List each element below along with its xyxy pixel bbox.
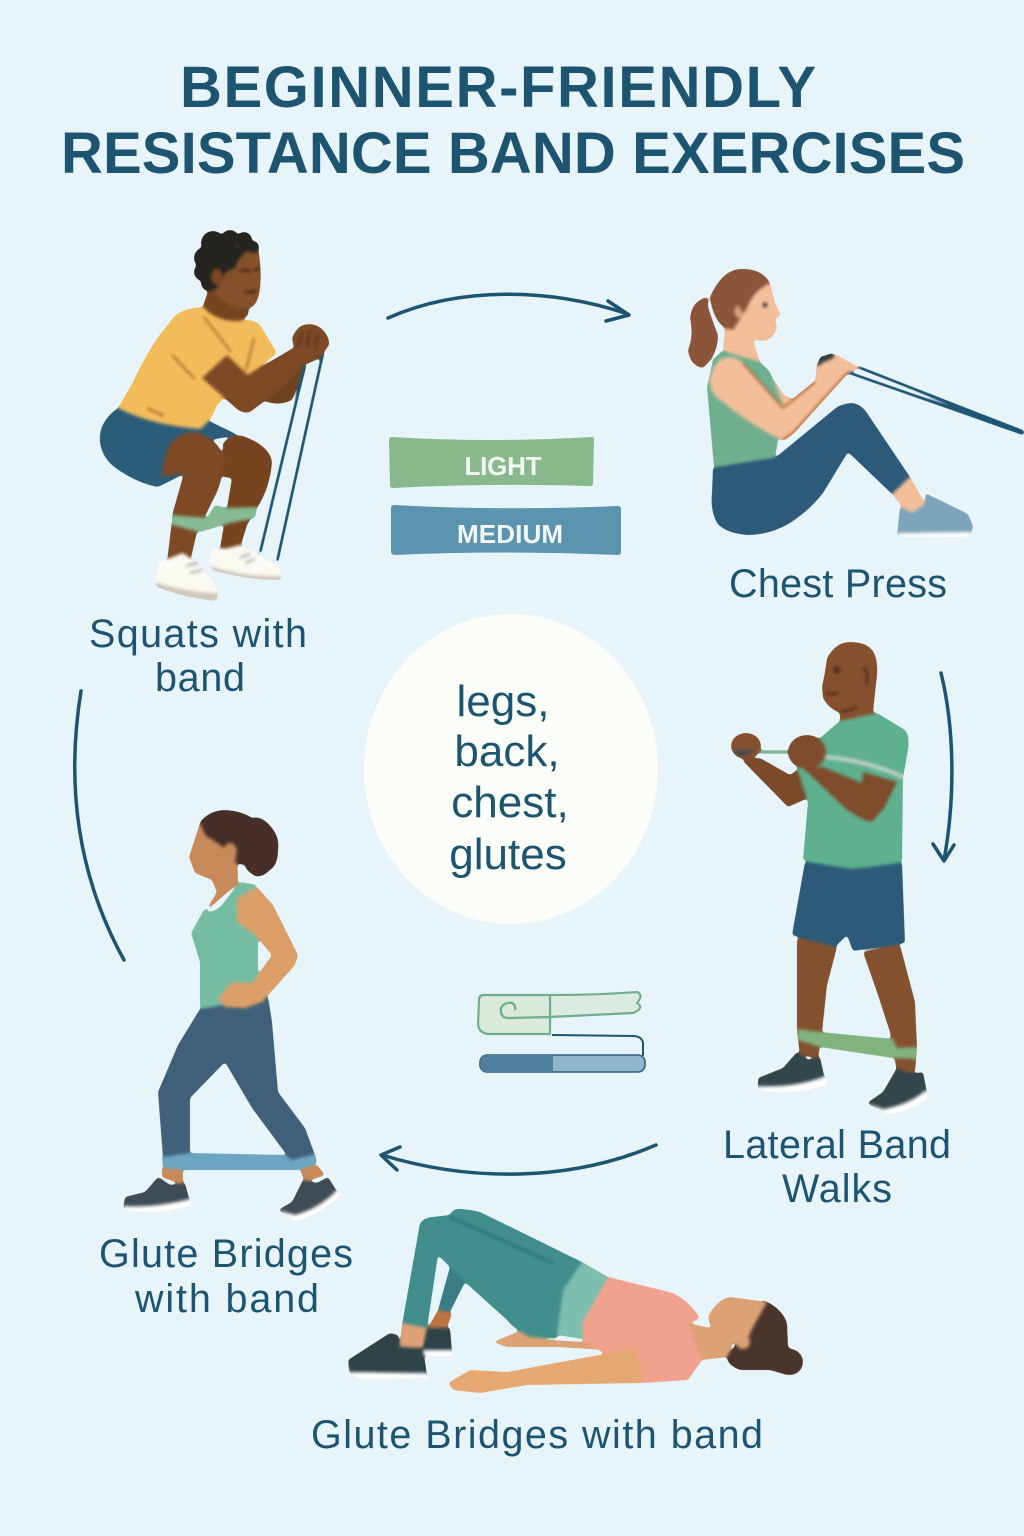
legs: [158, 997, 315, 1162]
arrow: chest press to lateral walks: [933, 673, 954, 861]
hair: [727, 1300, 795, 1375]
band lines: [260, 353, 323, 562]
face details: [826, 668, 867, 711]
arrow: lateral walks to bridges: [381, 1145, 656, 1174]
label: glute bridges bottom: Glute Bridges with band: [311, 1413, 763, 1457]
label: glute bridges left: with band: [134, 1277, 319, 1321]
band: [162, 1153, 317, 1170]
hair: [710, 269, 770, 330]
back calf: [438, 1267, 465, 1312]
fists: [788, 735, 826, 769]
ear: [736, 1335, 750, 1349]
ponytail: [688, 297, 718, 368]
handle: [817, 353, 834, 367]
band across chest: [825, 757, 903, 777]
head: [211, 245, 261, 309]
arrow: squats to chest press: [388, 294, 629, 321]
shoe: [897, 493, 973, 536]
center circle: target muscles: glutes: [449, 830, 567, 879]
face: [708, 1297, 767, 1344]
far arm: [240, 358, 303, 404]
neck: [687, 1323, 733, 1360]
back shoe: [423, 1328, 452, 1352]
arm line: [743, 363, 847, 440]
label: chest press: Chest Press: [729, 562, 947, 606]
figure: glute bridge: [347, 1209, 803, 1393]
band on legs: [798, 1029, 917, 1059]
center circle: target muscles: [364, 614, 658, 924]
head and neck: [822, 642, 877, 723]
label: squats: band: [155, 656, 245, 700]
ear: [735, 305, 744, 318]
green band: [172, 505, 257, 532]
hair: [200, 810, 278, 876]
neck: [203, 280, 250, 323]
ankle: [892, 477, 925, 513]
title: RESISTANCE BAND EXERCISES: [61, 121, 965, 186]
eye: [763, 303, 767, 307]
arm: [218, 887, 298, 1008]
band: light: [389, 437, 594, 488]
ankle: [400, 1323, 427, 1348]
band: light: LIGHT: [464, 451, 542, 481]
face and neck: [723, 282, 781, 362]
center circle: target muscles: legs,: [457, 677, 549, 726]
leg crease: [450, 1217, 553, 1263]
main leg: [402, 1209, 582, 1338]
face and neck: [189, 823, 238, 912]
title: BEGINNER-FRIENDLY: [180, 55, 816, 120]
top: [191, 882, 258, 1008]
ear: [224, 843, 236, 857]
far leg: [220, 436, 272, 548]
shirt: [797, 713, 909, 870]
tank top: [707, 351, 784, 467]
near arm: [803, 767, 897, 822]
arm: [710, 355, 860, 440]
hands: [292, 324, 329, 364]
band: medium: MEDIUM: [457, 519, 563, 549]
center circle: target muscles: chest,: [451, 778, 569, 827]
waistband: [557, 1262, 608, 1339]
far arm: [742, 758, 808, 807]
shoes: [758, 1052, 825, 1088]
center circle: target muscles: back,: [454, 727, 560, 776]
near leg: [162, 432, 224, 562]
far arm: [493, 1331, 607, 1350]
facial features: [240, 268, 260, 292]
shoes: [209, 545, 281, 580]
bun: [777, 1349, 803, 1375]
figure: standing woman with band: [123, 810, 340, 1221]
label: lateral band walks: Lateral Band: [723, 1123, 951, 1167]
label: lateral band walks: [723, 1123, 951, 1211]
label: glute bridges left: Glute Bridges: [99, 1232, 353, 1276]
back ankle: [428, 1310, 452, 1328]
cables: [847, 367, 1024, 434]
near arm: [448, 1348, 642, 1393]
near arm: [202, 348, 307, 413]
figure: chest press: [688, 269, 1024, 537]
legs: [797, 938, 837, 1058]
thigh and pants: [712, 403, 910, 535]
ankles: [162, 1165, 325, 1185]
ear: [211, 269, 223, 285]
shoes: [123, 1177, 190, 1208]
near shoe: [348, 1333, 427, 1375]
figure: lateral band walks: [731, 642, 928, 1114]
title: [61, 55, 965, 186]
label: squats: [89, 612, 307, 700]
top: [582, 1277, 702, 1383]
icon: rolled bands: [478, 992, 645, 1072]
label: squats: Squats with: [89, 612, 307, 656]
shirt: [118, 307, 277, 429]
shirt folds: [147, 317, 254, 416]
figure: squats: [100, 230, 329, 601]
arrow: left arc: [75, 691, 124, 960]
shorts: [100, 395, 238, 487]
far arm: [768, 372, 794, 415]
band: medium: [391, 505, 621, 555]
label: glute bridges left: [99, 1232, 353, 1321]
label: lateral band walks: Walks: [782, 1167, 892, 1211]
hair: [194, 230, 259, 291]
shorts: [792, 862, 905, 951]
